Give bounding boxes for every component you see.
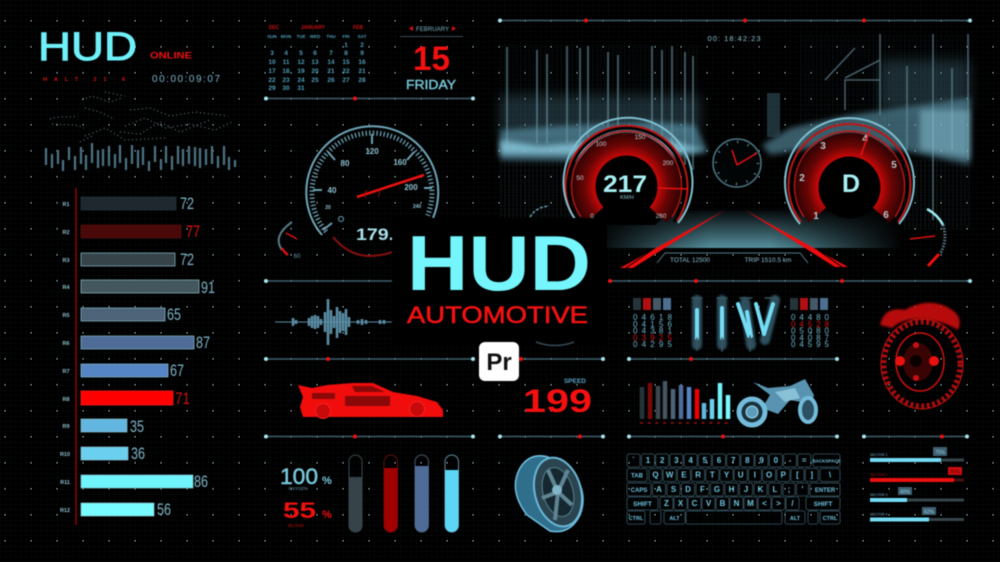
premiere pro badge: Pr [486,349,512,376]
slider 4: 62% [924,510,935,516]
calendar month header: JANUARY [301,25,326,31]
speed readout: 179. [356,225,394,244]
dial numbers: 240 [413,204,421,210]
slider 3: SECTOR 3 [870,493,887,497]
blood value: % [322,509,332,521]
slider 2: 90% [950,470,961,476]
left gauge scale: 200 [663,160,674,167]
left numbers: 04618 [633,313,673,322]
row 4: B [720,499,726,508]
left numbers: 04295 [633,340,673,349]
left numbers: 04381 [633,326,673,336]
row 1: 7 [731,456,736,465]
slider 3 [870,487,964,502]
trip panel [657,253,808,264]
calendar days: 21 [327,68,335,75]
left gauge scale: 0 [590,213,594,220]
right selector blocks [790,298,828,310]
calendar days: 14 [327,59,335,66]
bar labels: R4 [62,285,70,291]
dividers [266,20,970,436]
row 1: 3 [674,456,679,465]
row 4: Z [664,499,669,508]
trip panel: TRIP 1510.5 km [745,257,791,264]
scatter plot dots [50,92,232,142]
suspension pistons [692,298,778,351]
calendar days: 6 [313,50,317,57]
row 2: O [766,470,772,480]
row 2: ] [810,470,813,480]
row 1: ` [632,456,635,465]
red arc [333,237,392,256]
row 2: R [695,470,701,480]
dial numbers: 80 [341,159,350,168]
dial numbers: 200 [404,183,418,192]
small fuel gauge [279,222,301,260]
row 1: - [789,456,792,465]
outer arc [306,126,438,235]
bar values [130,194,215,519]
row 4: V [706,499,712,508]
row 2: \ [829,470,832,480]
left numbers [633,313,673,349]
row 1: BACKSPACE [812,458,841,464]
row 4: < [762,499,767,508]
slider 1: 75% [935,450,946,456]
hub circle [338,216,344,222]
bar values: 56 [157,500,171,519]
small fuel gauge: 60 [294,254,301,260]
calendar days: 22 [268,77,276,84]
car wireframe [298,383,443,418]
temperature gauge [910,209,945,266]
gear scale: 4 [862,134,868,145]
row 4: / [791,499,794,508]
row 1: 4 [688,456,693,465]
calendar days: 30 [282,85,290,92]
speed readout 199 [523,378,592,419]
bar values: 87 [196,333,210,352]
row 4: X [678,499,684,508]
timer: 00:00:09:07 [152,74,220,85]
calendar days [268,42,366,92]
row 4: N [734,499,740,508]
row 1 [627,454,841,467]
gear scale: 3 [820,141,826,152]
speed label: SPEED [564,378,586,385]
left gauge [564,118,693,225]
calendar days: 25 [311,77,319,84]
calendar days: 13 [311,59,319,66]
slider 2 [870,467,964,482]
road lines [620,210,848,268]
row 3: D [685,485,691,494]
row 4: SHIFT [633,501,652,508]
dial numbers: 120 [365,147,379,156]
row 3: J [744,485,748,494]
panel: dashboard city view [500,34,970,268]
brake disc [880,303,963,409]
calendar days: 23 [282,77,290,84]
row 2: W [666,470,674,480]
bars [81,197,199,516]
row 3: H [729,485,735,494]
calendar days: 19 [297,68,305,75]
row 4 [627,497,840,510]
calendar days: 10 [268,59,276,66]
panel: oxygen and blood [280,455,458,532]
bar labels: R12 [60,508,70,514]
axis line [75,188,77,525]
row 5: CTRL [823,516,838,522]
calendar days: 22 [342,68,350,75]
right gauge [785,118,914,224]
right numbers: 04087 [791,334,830,342]
row 3: A [656,485,662,494]
left numbers: 03925 [633,334,673,342]
title: small HUD: HUD [38,25,137,69]
row 2: P [781,470,787,480]
title: HUD: HUD [407,219,591,307]
calendar month header: DEC [269,25,280,31]
calendar days: 21 [358,68,366,75]
row 1: 9 [759,456,764,465]
calendar days: 11 [283,59,290,66]
trip panel: TOTAL 12500 [670,257,710,264]
row 3: K [758,485,764,494]
speed readout 217: 217 [603,171,647,198]
km/h label: KM/H [620,195,634,201]
calendar days: 18 [282,68,290,75]
panel: sensor readouts [633,298,830,351]
code label: HALT 21 6 [43,77,125,83]
row 5 [627,511,840,524]
gear scale: 5 [891,160,897,171]
bar labels: R7 [62,369,70,375]
slider 4 [870,507,964,522]
calendar days: 12 [297,59,305,66]
panel: date widget [400,26,463,92]
dial numbers: 160 [393,158,407,167]
calendar weekdays: THU [326,34,336,39]
bar labels: R2 [62,230,70,236]
online label: ONLINE [150,50,192,62]
wireframe city right [762,34,970,230]
calendar days: 26 [327,77,335,84]
dial numbers: 40 [328,186,337,195]
left gauge needle [658,188,688,189]
right numbers [791,313,830,349]
bar labels: R10 [60,452,70,458]
calendar days: 17 [268,68,276,75]
keyboard [627,454,841,524]
row 2: Y [724,470,730,480]
bar values: 72 [180,194,194,213]
clock time: 00: 18:42:23 [708,34,760,43]
waveform [275,299,392,345]
panel: sector sliders [870,447,964,522]
row 3: G [714,485,720,494]
calendar days: 3 [270,50,274,57]
small gauge left of dash [530,206,549,217]
row 3: ' [802,485,804,494]
date number: 15 [413,40,450,78]
tire wireframe [515,452,589,532]
left gauge scale: 150 [635,134,646,141]
road glow [607,210,903,248]
row 1: 2 [660,456,665,465]
premiere pro badge [479,342,519,381]
panel: calendar [267,25,367,92]
bar labels: R3 [62,258,70,264]
slider 1: SECTOR 1 [870,453,887,457]
right numbers: 04595 [791,340,830,349]
oxygen value: % [322,475,332,487]
oxygen value: OXYGEN [288,486,308,491]
left numbers: 04156 [633,320,673,329]
slider 2: SECTOR 2 [870,473,887,477]
row 1: 5 [703,456,708,465]
bar values: 36 [131,444,145,463]
center title block [392,218,607,346]
calendar weekdays: SAT [358,34,367,39]
calendar days: 24 [297,77,305,84]
bar labels: R9 [62,424,70,430]
gear scale [799,134,897,222]
calendar weekdays: FRI [342,34,350,39]
row 5: ALT [790,516,801,522]
row 5: CTRL [629,516,644,522]
wireframe city left [500,45,708,225]
calendar weekdays [267,34,367,39]
calendar days: 29 [268,85,276,92]
calendar weekdays: WED [310,34,321,39]
calendar days: 9 [360,50,364,57]
bar labels: R8 [62,397,70,403]
left gauge scale: 50 [576,175,584,182]
dial numbers [325,147,421,211]
row 4: C [692,499,698,508]
motorcycle [739,379,816,425]
bar values: 65 [167,305,181,324]
bar labels: R5 [62,313,70,319]
left gauge scale: 260 [656,213,667,220]
tick marks [312,133,432,232]
test tube gauges [349,455,458,532]
bar values: 91 [201,278,215,297]
calendar days: 20 [311,68,319,75]
calendar month header: FEB [353,25,363,31]
analog clock [713,139,761,187]
speed readout 199: 199 [523,383,592,419]
calendar days: 16 [358,59,366,66]
blood value: 55 [283,498,316,523]
row 1: 0 [774,456,779,465]
calendar days: 7 [329,50,333,57]
row 1: = [802,456,807,465]
bar values: 35 [130,417,144,436]
right numbers: 04528 [791,320,830,329]
needle [357,175,424,198]
row 1: 1 [646,456,651,465]
bar values: 72 [180,250,194,269]
row 2: I [754,470,756,480]
calendar days: 27 [342,77,350,84]
bar labels [60,202,70,514]
left gauge scale [576,134,674,220]
row 2: U [738,470,744,480]
equalizer bars [46,143,235,171]
calendar days: 8 [344,50,348,57]
row 2 [627,468,840,482]
calendar days: 2 [360,42,364,49]
month selector: FEBRUARY [416,27,449,33]
row 2: E [681,470,687,480]
blood value [283,498,332,528]
speedometer [306,126,438,256]
slider 1 [870,447,964,462]
row 1: 8 [745,456,750,465]
bar labels: R1 [62,202,70,208]
panel: bar chart R1-R12 [60,188,215,525]
row 4: > [776,499,781,508]
calendar days: 15 [342,59,350,66]
calendar weekdays: SUN [267,34,277,39]
calendar days: 31 [297,85,305,92]
bar labels: R11 [60,480,70,486]
bar values: 71 [175,389,190,408]
left gauge scale: 100 [596,141,607,148]
bar values: 77 [186,222,200,241]
right gauge needle [861,130,870,155]
right numbers: 05080 [791,326,830,336]
row 3: F [700,485,705,494]
oxygen value: 100 [280,464,318,489]
row 1: 6 [717,456,722,465]
oxygen value [280,464,332,491]
row 5: ALT [669,516,680,522]
calendar days: 28 [358,77,366,84]
subtitle: AUTOMOTIVE: AUTOMOTIVE [407,302,588,329]
row 3: S [671,485,677,494]
row 2: Q [652,470,659,480]
weekday: FRIDAY [406,77,456,92]
slider 4: SECTOR 4 [870,512,887,516]
bar labels: R6 [62,341,70,347]
bar values: 86 [194,472,208,491]
row 4: SHIFT [814,501,832,508]
row 4: M [747,499,754,508]
calendar days: 4 [284,50,288,57]
gear scale: 2 [799,173,805,184]
row 3 [627,483,840,496]
mini bar chart [640,381,730,423]
panel: status header [38,25,235,171]
row 2: T [710,470,715,480]
row 3: ; [788,485,790,494]
row 3: L [773,485,778,494]
calendar days: 5 [299,50,303,57]
calendar weekdays: TUE [296,34,306,39]
gear scale: 1 [813,211,819,222]
calendar weekdays: MON [281,34,291,39]
row 2: [ [796,470,799,480]
calendar month header [269,25,363,31]
calendar days: 1 [344,42,348,49]
gear scale: 6 [883,210,889,221]
left selector blocks [633,298,671,310]
row 3: ENTER [815,488,836,494]
row 2: TAB [631,474,644,480]
blood value: BLOOD [288,523,305,528]
bar values: 67 [170,361,184,380]
gear D: D [842,170,860,198]
dial numbers: 20 [325,205,331,211]
right numbers: 04480 [791,313,830,322]
row 3: CAPS [631,488,647,494]
slider 3: 40% [900,490,911,496]
